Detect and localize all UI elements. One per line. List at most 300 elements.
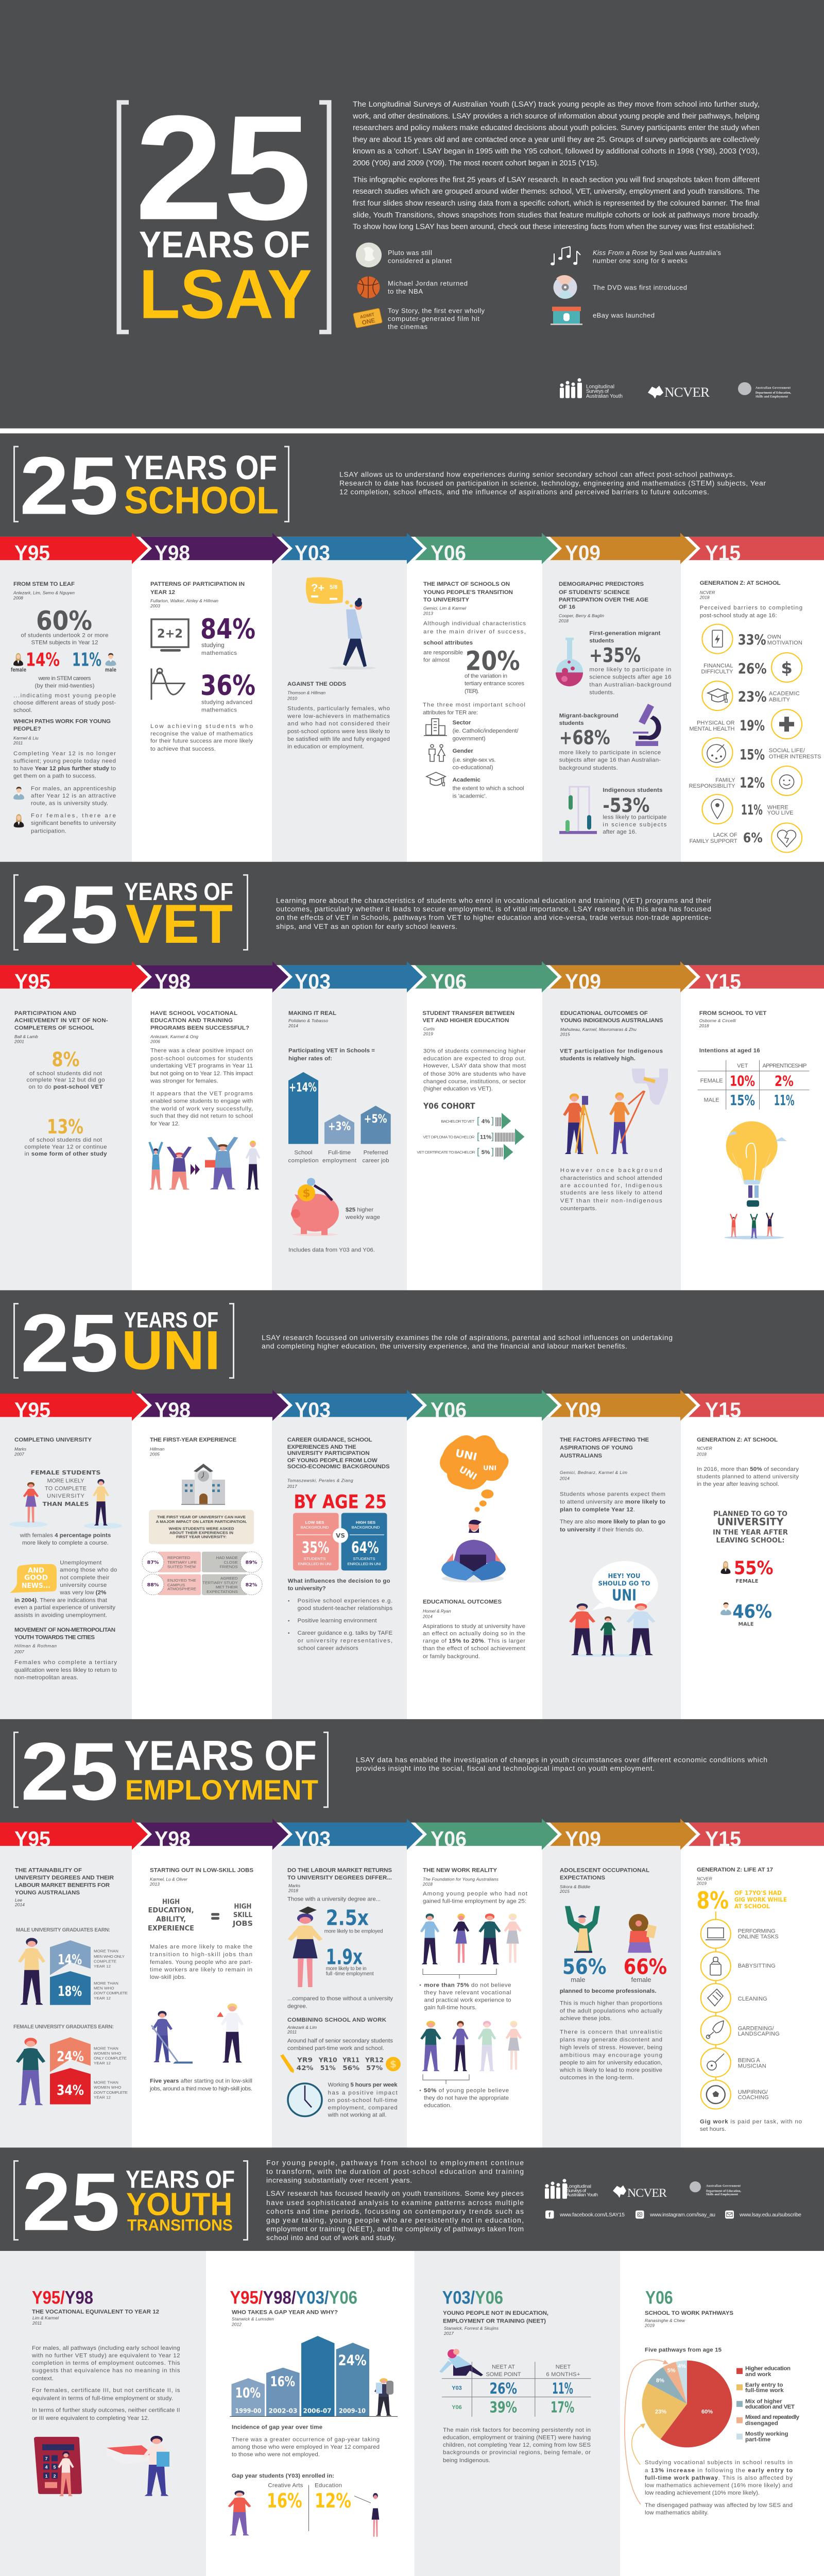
heading: vocational equivalent: [32, 2309, 159, 2326]
text: studying advanced mathematics: studying advanced: [201, 700, 252, 706]
chart row: bachelor to VET: ]: [491, 1115, 494, 1126]
text: drop out: 30% of students commencing higher: [423, 1048, 526, 1055]
text: against the odds: and who had not considered their: [287, 721, 390, 727]
pie chart: five pathways: [642, 2361, 732, 2447]
text: transition: low-skill jobs.: [150, 1974, 186, 1980]
table: NEET: Y06: [452, 2404, 462, 2411]
barrier: own motivation: MOTIVATION: [767, 640, 802, 646]
pie chart: five pathways: 23%: [655, 2409, 666, 2415]
intro text: 2006 (Y06) and 2009 (Y09). The most recent cohort began in 2015 (Y15).: [353, 159, 599, 167]
box: low SES: ENROLLED IN UNI: [298, 1562, 331, 1566]
bracket right: [243, 875, 247, 950]
illustration: woman sitting: [439, 2349, 483, 2376]
fact: Toy Story: [388, 307, 485, 331]
heading: school VET programs: [150, 1010, 249, 1044]
barrier: family responsibility: RESPONSIBILITY: [689, 783, 735, 789]
pie chart: five pathways: 60%: [701, 2409, 713, 2415]
icon: DVD: [553, 275, 577, 299]
cohort banner: VET: [0, 961, 824, 993]
heading: low-skill jobs: STARTING OUT IN LOW-SKILL JOBS: [150, 1868, 253, 1874]
stat: 88% campus atmosphere: 88%: [147, 1582, 159, 1588]
text: five years: jobs, around a third move to high-skill jobs.: [149, 2086, 252, 2092]
title: employment: EMPLOYMENT: [125, 1774, 318, 1806]
text: vocational subjects: Studying vocational subjects in school results in: [645, 2460, 793, 2466]
equation: high education: ABILITY,: [156, 1916, 186, 1923]
table: year levels: YR11: [342, 2057, 359, 2064]
text: drop out: [423, 1048, 526, 1092]
text: among young people: gained full-time employment by age 25:: [423, 1899, 526, 1904]
table: NEET: 39%: [489, 2399, 517, 2416]
illustration: calculator and woman: 5: [53, 2465, 56, 2470]
heading: new work reality: [422, 1868, 499, 1887]
heading: generation Z: [696, 1437, 778, 1456]
stat: 11% male: 11%: [72, 649, 101, 671]
fact: Pluto: considered a planet: [388, 257, 452, 264]
text: much higher: of the adult populations who actually: [560, 2008, 662, 2014]
stat: education: Education: [315, 2482, 342, 2488]
heading: attainability: UNIVERSITY DEGREES AND THEIR: [15, 1875, 114, 1881]
text: five hours: [328, 2082, 398, 2119]
heading: vocational equivalent: THE VOCATIONAL EQUIVALENT TO YEAR 12: [32, 2309, 159, 2315]
text: male earnings: MORE THAN: [94, 1948, 118, 1953]
title: transitions: TRANSITIONS: [127, 2216, 233, 2234]
logo: Australian Government: Department of Education,: [706, 2190, 742, 2193]
text: what influences: to university?: [288, 1586, 326, 1592]
icon: coin: $: [390, 2059, 397, 2070]
intro: youth transitions: employment or training (NEET), and the complexity of pathways taken from: [266, 2225, 524, 2233]
bracket right: [284, 447, 288, 521]
title: years of: YEARS OF: [126, 2166, 235, 2193]
list: influences: Positive school experiences e.g.: [298, 1598, 392, 1604]
text: female students more likely: TO COMPLETE: [45, 1486, 87, 1492]
bracket left: [14, 2161, 19, 2240]
cohort banner: employment: [0, 1819, 824, 1851]
pie chart: five pathways: 4%: [678, 2363, 686, 2369]
text: academic: the extent to which a school: [453, 786, 524, 791]
heading: student transfer: STUDENT TRANSFER BETWEEN: [422, 1010, 514, 1016]
text: gig work definition: [700, 2119, 802, 2132]
cohort labels: Y06: [431, 1827, 467, 1851]
text: other study: of school students did not: [29, 1137, 102, 1143]
barrier: family responsibility: [689, 766, 802, 795]
text: drop out: of those 30% are students who have: [423, 1071, 526, 1077]
text: first-generation: students: [589, 638, 614, 644]
legend: pathways: Mixed and repeatedly: [745, 2414, 800, 2420]
title: years of: YEARS OF: [124, 878, 233, 906]
text: 75%: [420, 1982, 511, 2011]
text: female earnings: WOMEN WHO: [94, 2085, 121, 2090]
icon: clock: [288, 2083, 322, 2116]
heading: educational outcomes: Homel & Ryan: [423, 1608, 451, 1614]
barrier: financial difficulty: FINANCIAL: [703, 663, 733, 669]
text: however: VET than their non-Indigenous: [560, 1198, 662, 1204]
text: unemployment: not complete their: [60, 1575, 110, 1581]
fact: Michael Jordan: to the NBA: [388, 287, 423, 295]
text: variation in TER: [465, 673, 524, 694]
table: year levels: YR12: [365, 2057, 384, 2064]
legend: pathways: Higher education: [745, 2366, 791, 2372]
text: migrant more likely: subjects after age 16 than Australian-: [559, 757, 661, 764]
illustration: woman with notes: [628, 1914, 657, 1953]
illustration: four workers top: [420, 1913, 522, 1964]
text: concern: [559, 2029, 662, 2081]
text: world of work: enabled some students to engage with: [150, 1098, 253, 1104]
panel: hero introduction: [0, 0, 824, 433]
text: occurrence: to those who were not employed.: [232, 2452, 320, 2458]
stat: 66% female: 66%: [624, 1955, 667, 1979]
text: perceived barriers: [700, 605, 802, 619]
text: first-generation: First-generation migrant: [589, 631, 661, 636]
table: year levels: YR9: [297, 2057, 313, 2064]
table: NEET: [442, 2362, 591, 2417]
stat: 87% tertiary life: [142, 1552, 201, 1572]
stat: 36%: 36%: [200, 670, 255, 701]
heading: career guidance: [287, 1437, 390, 1489]
panel: Y95 VET: [0, 989, 132, 1290]
cohort labels: Y09: [565, 1827, 601, 1851]
text: against the odds: post-school options were less likely to: [287, 728, 390, 735]
arrow: disengaged pathway: [625, 2360, 668, 2504]
heading: NEET: Stanwick, Forrest & Skujins: [444, 2326, 499, 2331]
cohort labels: [14, 1398, 741, 1421]
bracket left: [14, 1732, 19, 1807]
bar chart: VET in schools: employment: [322, 1158, 357, 1164]
text: gender: [453, 748, 496, 771]
text: male earnings: COMPLETE: [94, 1959, 116, 1963]
panel: Y06 employment: [407, 1846, 542, 2147]
text: migrant more likely: background students.: [559, 765, 618, 771]
text: males: [31, 786, 116, 806]
chart: female earnings: 34%: [57, 2082, 84, 2098]
heading: gap year: WHO TAKES A GAP YEAR AND WHY?: [232, 2310, 338, 2316]
chart row: bachelor to VET: [: [477, 1115, 479, 1126]
intro: school: Research to date has focused on participation in science, technology, engineering and mathematics (STEM) subjects, Year: [339, 480, 766, 487]
text: transition: [150, 1944, 252, 1980]
text: risk factors: being Indigenous.: [443, 2458, 490, 2464]
section header: youth transitions: [0, 2147, 824, 2251]
heading: career guidance: Tomaszewski, Perales & Ziang: [287, 1478, 353, 1483]
text: male earnings: MORE THAN: [94, 1981, 118, 1986]
text: less likely: in science subjects: [603, 822, 667, 828]
badge: versus: VS: [336, 1532, 345, 1539]
text: world of work: It appears that the VET programs: [150, 1091, 253, 1097]
text: vocational subjects: low reading achievement (10% more likely).: [645, 2490, 760, 2496]
text: world of work: [150, 1091, 253, 1127]
table: intentions: MALE: [704, 1097, 719, 1103]
illustration: calculator and woman: 4: [45, 2465, 48, 2470]
equation: high education: SKILL: [233, 1911, 252, 1919]
heading: against the odds: AGAINST THE ODDS: [287, 681, 346, 687]
text: females: [31, 813, 116, 834]
text: males and females: In terms of further study outcomes, neither certificate II: [32, 2407, 180, 2413]
heading: making it real: [288, 1010, 336, 1028]
text: VET participation: students is relatively high.: [560, 1056, 636, 1062]
social: facebook: [545, 2210, 625, 2218]
heading: completing university: Marks: [14, 1447, 26, 1451]
text: although: Although individual characteristics: [423, 621, 526, 627]
text: higher rates: [288, 1048, 375, 1062]
text: much higher: achieve these jobs.: [560, 2015, 612, 2022]
text: unemployment: Unemployment: [60, 1560, 102, 1566]
icon: ticket: [353, 308, 383, 328]
text: risk factors: backgrounds or provincial regions, being female, or: [443, 2450, 591, 2456]
panel: Y98 VET: [132, 989, 272, 1290]
heading: against the odds: Thomson & Hillman: [287, 690, 325, 696]
text: against the odds: Students, particularly females, who: [287, 706, 390, 711]
heading: generation Z: NCVER: [697, 1446, 712, 1451]
text: gig work definition: Gig work is paid per task, with no: [700, 2119, 802, 2125]
text: aspirations: an effect on actually doing so in the: [423, 1631, 525, 1637]
text: world of work: the world of work very successfully,: [150, 1106, 253, 1112]
illustration: cleaner and scientist: [151, 2004, 244, 2063]
title: LSAY: LSAY: [139, 256, 312, 333]
illustration: man arms raised: [565, 1906, 600, 1953]
stat: 87% tertiary life: TERTIARY LIFE: [167, 1560, 197, 1565]
intro: employment: [356, 1756, 767, 1772]
list: influences: school career advisors: [298, 1646, 358, 1651]
barrier: where you live: YOU LIVE: [767, 810, 793, 816]
text: against the odds: in education or employment.: [287, 744, 364, 750]
text: vocational subjects: a 13% increase in following the early entry to: [645, 2468, 793, 2473]
bar chart: gap year incidence: 16%: [270, 2374, 295, 2389]
heading: demographic predictors: Cooper, Berry & Baglin: [559, 613, 604, 618]
intro: VET: on the effects of VET in Schools, pathways from VET to higher education and vice-versa, trade versus non-trade apprentice-: [276, 914, 711, 922]
logo: LSAY: [560, 378, 623, 399]
chart row: VET certificate to bachelor: [417, 1144, 513, 1160]
fact: Toy Story: the cinemas: [388, 323, 427, 331]
text: although: school attributes: [423, 640, 473, 646]
barrier: financial difficulty: DIFFICULTY: [701, 669, 733, 675]
intro: youth transitions: For young people, pathways from school to employment continue: [266, 2159, 524, 2167]
logo: Australian Government: Australian Government: [706, 2185, 741, 2188]
illustration: backpacker: [374, 2378, 393, 2416]
title: youth: YOUTH: [126, 2187, 232, 2222]
intro text: known as a 'cohort'. LSAY began in 1995 with the Y95 cohort, followed by additional cohorts in 1998 (Y98), 2003 (Y03),: [353, 147, 760, 156]
intro text: [352, 100, 760, 231]
table: intentions: FEMALE: [700, 1078, 723, 1084]
heading: impact of schools: YOUNG PEOPLE'S TRANSITION: [423, 589, 513, 596]
text: those with a degree: Those with a university degree are...: [287, 1896, 381, 1903]
text: much higher: [560, 2001, 662, 2022]
heading: school VET programs: 2006: [150, 1039, 160, 1044]
stat: 84%: 84%: [200, 613, 255, 645]
barrier: physical or mental health: MENTAL HEALTH: [689, 726, 734, 732]
barrier: social life: OTHER INTERESTS: [769, 754, 821, 760]
chart: male earnings: [50, 1940, 91, 2005]
text: what influences: What influences the decision to go: [288, 1578, 390, 1584]
cohort labels: Y95: [14, 541, 50, 565]
heading: new work reality: The Foundation for Young Australians: [423, 1877, 499, 1882]
intro text: The Longitudinal Surveys of Australian Youth (LSAY) track young people as they move from school into further study,: [353, 100, 760, 109]
title: years of: YEARS OF: [124, 449, 277, 487]
text: male earnings: DON'T COMPLETE: [94, 1991, 128, 1995]
text: completing year 12: to have Year 12 plus further study to: [13, 766, 116, 772]
text: concern: which is likely to lead to more positive: [559, 2067, 662, 2073]
equation: high education: HIGH: [162, 1898, 180, 1906]
illustration: piggy bank: [291, 1178, 339, 1236]
text: full-time: full -time employment: [326, 1971, 374, 1977]
barrier: family responsibility: FAMILY: [715, 777, 735, 783]
heading: from STEM to LEAF: Anlezark, Lim, Semo & Nguyen: [13, 590, 75, 595]
gig: online tasks: ONLINE TASKS: [738, 1934, 779, 1940]
text: migrant-background: [559, 713, 619, 726]
cohort labels: Y03: [295, 541, 330, 565]
text: gender: Gender: [453, 748, 473, 754]
text: female earnings: MORE THAN: [94, 2080, 118, 2085]
text: concern: people to aim for university education,: [560, 2060, 662, 2066]
text: other study: in some form of other study: [25, 1151, 107, 1157]
text: unemployment: assists in avoiding unemployment.: [14, 1613, 107, 1619]
text: post-school VET: [27, 1071, 105, 1090]
panel: Y95 employment: [0, 1846, 132, 2147]
gig: babysitting: [701, 1952, 776, 1980]
heading: from school to VET: FROM SCHOOL TO VET: [699, 1010, 766, 1016]
heading: first-year experience: 2005: [149, 1452, 160, 1457]
illustration: students to workers: [148, 1137, 260, 1190]
text: concern: plans may generate discontent and: [560, 2037, 662, 2043]
legend: pathways: disengaged: [745, 2420, 778, 2427]
text: five hours: employment, compared: [328, 2105, 398, 2111]
logo: LSAY: Longitudinal: [586, 384, 614, 389]
text: other study: complete Year 12 or continue: [25, 1144, 107, 1150]
text: five hours: has a positive impact: [328, 2090, 398, 2096]
text: occurrence: There was a greater occurrence of gap-year taking: [232, 2437, 380, 2443]
text: female students more likely: UNIVERSITY: [47, 1493, 84, 1499]
text: STEM subjects: STEM subjects in Year 12: [31, 640, 98, 646]
fact: Toy Story: computer-generated film hit: [388, 315, 479, 323]
text: academic: [453, 777, 524, 799]
logo: LSAY: Longitudinal: [566, 2184, 591, 2189]
heading: adolescent expectations: [559, 1868, 649, 1894]
intro: VET: outcomes, particularly whether it leads to secure employment, is of vital importance. LSAY research in this area has focused: [276, 905, 711, 913]
icon: female: [13, 653, 23, 666]
cohort labels: Y15: [705, 1398, 741, 1421]
logo: Australian Government: [690, 2181, 742, 2196]
heading: adolescent expectations: Sikora & Biddie: [560, 1884, 590, 1889]
text: disengaged: low mathematics ability.: [645, 2510, 709, 2516]
text: 50%: they do not have the appropriate: [424, 2095, 509, 2101]
text: parents expect: [560, 1492, 665, 1533]
speech bubble: SHOULD GO TO: [598, 1580, 650, 1587]
text: VET participation: VET participation for Indigenous: [560, 1048, 663, 1055]
heading: demographic predictors: [558, 581, 648, 623]
heading: educational outcomes indigenous: EDUCATIONAL OUTCOMES OF: [560, 1010, 648, 1016]
text: parents expect: plan to complete Year 12.: [560, 1507, 635, 1513]
text: although: for almost: [423, 657, 450, 663]
chart: male earnings: 14%: [58, 1952, 82, 1968]
heading: new work reality: THE NEW WORK REALITY: [423, 1868, 497, 1874]
text: variation in TER: of the variation in: [465, 673, 507, 679]
title: years of: YEARS OF: [139, 224, 310, 265]
text: half of students: Around half of senior secondary students: [287, 2038, 393, 2044]
heading: impact of schools: Gemici, Lim & Karmel: [423, 606, 467, 611]
text: females tertiary: qualifcation were less likley to return to: [14, 1667, 117, 1673]
panel: Y09 school: [542, 560, 681, 862]
text: more likely first generation: students.: [589, 689, 614, 696]
cohort labels: Y06: [431, 970, 467, 993]
cohort label: Y95/Y98/Y03/Y06: [230, 2288, 357, 2308]
bar chart: VET in schools: +3%: [328, 1120, 351, 1133]
intro text: research studies which are grouped around wider themes: school, VET, university, employment and youth transitions. The: [353, 188, 760, 196]
callout: first year: WHEN STUDENTS WERE ASKED: [169, 1526, 234, 1531]
box: high SES: [341, 1513, 387, 1570]
chart row: VET diploma to bachelor: ]: [491, 1131, 494, 1141]
cohort labels: Y95: [14, 1398, 50, 1421]
title: UNI: UNI: [122, 1320, 220, 1381]
text: occurrence: among those who were employed in Year 12 compared: [232, 2444, 380, 2450]
label: male: MALE: [739, 1621, 753, 1627]
legend: pathways: full-time work: [745, 2387, 784, 2394]
fact: Kiss From a Rose: number one song for 6 weeks: [593, 257, 688, 264]
heading: which paths: 2011: [13, 740, 23, 745]
legend: pathways: Early entry to: [745, 2382, 783, 2388]
text: STEM careers: (by their mid-twenties): [35, 683, 95, 689]
heading: which paths: Karmel & Liu: [13, 736, 39, 740]
fact: Michael Jordan: [388, 280, 468, 295]
icon: male small: [13, 787, 24, 800]
heading: school VET programs: PROGRAMS BEEN SUCCESSFUL?: [150, 1025, 249, 1031]
text: positive impact: was stronger for females.: [150, 1078, 218, 1084]
heading: low-skill jobs: Karmel, Lu & Oliver: [150, 1877, 188, 1882]
text: 75%: and practical work experience to: [424, 1997, 511, 2003]
panel: Y95 school: [0, 560, 132, 862]
logo: Australian Government: Australian Government: [756, 386, 791, 389]
text: more likely first generation: than Australian-background: [589, 682, 671, 688]
heading: labour market returns: Marks: [288, 1883, 300, 1888]
text: half of students: [287, 2038, 393, 2052]
text: parents expect: to attend university are more likely to: [560, 1499, 665, 1505]
text: sector: government): [453, 736, 486, 742]
icon: graduation cap: [426, 772, 445, 786]
text: indigenous: Indigenous students: [603, 787, 662, 793]
text: drop out: (higher education vs VET).: [423, 1086, 493, 1092]
heading: planned to go to university: [713, 1511, 788, 1545]
cohort labels: Y03: [295, 1827, 331, 1851]
icon: female: [721, 1561, 730, 1574]
panel: Y15 school: [681, 560, 824, 862]
text: unemployment: in 2004). There are indications that: [14, 1598, 108, 1603]
text: vocational subjects: full-time work pathway. This is also affected by: [645, 2475, 793, 2481]
heading: factors affecting aspirations: Gemici, Bednarz, Karmel & Lim: [560, 1470, 627, 1475]
text: STEM careers: [35, 675, 95, 689]
text: low achieving: recognise the value of mathematics: [150, 731, 253, 737]
intro: UNI: LSAY research focussed on university examines the role of aspirations, parental and school influences on undertaking: [262, 1334, 673, 1342]
fact: Kiss From a Rose: Kiss From a Rose by Seal was Australia's: [593, 249, 721, 257]
text: 50%: education.: [424, 2103, 452, 2109]
text: aspirations: or family background.: [423, 1654, 480, 1659]
text: other study: [25, 1137, 107, 1157]
text: unemployment: among those who do: [60, 1567, 117, 1573]
title: 25: 25: [20, 440, 118, 532]
heading: first-year experience: [149, 1437, 236, 1457]
panel: Y98 employment: [132, 1846, 272, 2147]
heading: career guidance: EXPERIENCES AND THE: [287, 1444, 356, 1450]
text: post-school VET: of school students did not: [29, 1071, 102, 1077]
bar chart: VET in schools: +14%: [289, 1080, 317, 1094]
stat: +35%: +35%: [589, 645, 641, 667]
heading: educational outcomes: [422, 1599, 502, 1619]
heading: attainability: Lee: [15, 1897, 23, 1903]
text: migrant-background: Migrant-background: [559, 713, 619, 719]
illustration: man pointing: [18, 1938, 45, 2005]
heading: movement of non-metropolitan youth: MOVEMENT OF NON-METROPOLITAN: [14, 1627, 115, 1633]
heading: patterns of participation: [150, 581, 245, 608]
text: post-school VET: on to do post-school VET: [29, 1084, 103, 1090]
heading: patterns of participation: PATTERNS OF PARTICIPATION IN: [150, 581, 245, 587]
heading: against the odds: [287, 681, 346, 701]
icon: male and female: [429, 744, 445, 761]
text: however: counterparts.: [560, 1206, 597, 1212]
